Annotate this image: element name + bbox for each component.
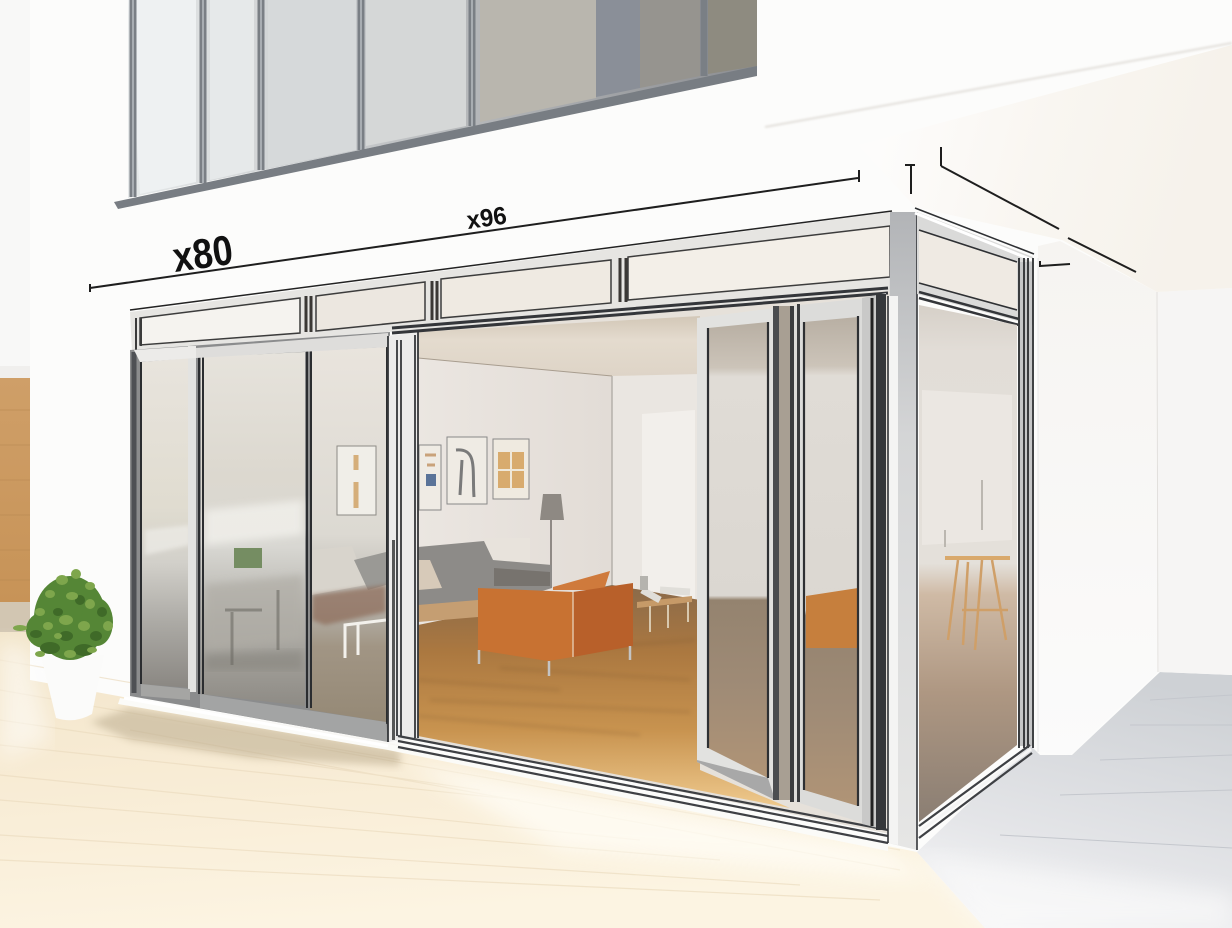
ceiling soffit bbox=[758, 0, 1232, 292]
deck floor bbox=[0, 632, 985, 928]
left sliding glass bbox=[124, 332, 390, 746]
upper windows bbox=[114, 0, 757, 209]
potted plant bbox=[13, 569, 113, 720]
pot bbox=[42, 655, 104, 720]
grey terrace floor bbox=[917, 672, 1232, 928]
artwork bbox=[419, 437, 529, 510]
far right wall bbox=[1157, 288, 1232, 675]
header rail above opening bbox=[392, 288, 888, 333]
reflected picture bbox=[337, 446, 376, 515]
wood cladding bbox=[0, 378, 30, 632]
coffee table bbox=[637, 576, 692, 632]
grey sofa bbox=[418, 538, 552, 622]
bottom sill bbox=[398, 736, 888, 843]
dimension lines bbox=[90, 147, 1136, 292]
interior room bbox=[415, 290, 895, 835]
right side transom bbox=[915, 208, 1034, 328]
orange armchair bbox=[478, 571, 633, 676]
floor lamp bbox=[540, 494, 564, 572]
label: x80: x80 bbox=[170, 226, 236, 281]
central mullion bbox=[388, 332, 418, 742]
right side glass bbox=[919, 258, 1033, 838]
reflected table bbox=[345, 620, 386, 658]
side wall return bbox=[1038, 241, 1158, 755]
foliage bbox=[13, 569, 113, 660]
label: x96: x96 bbox=[465, 202, 508, 235]
corner post bbox=[888, 212, 917, 850]
transom frame bbox=[130, 211, 892, 352]
folding door leaves bbox=[697, 293, 886, 830]
